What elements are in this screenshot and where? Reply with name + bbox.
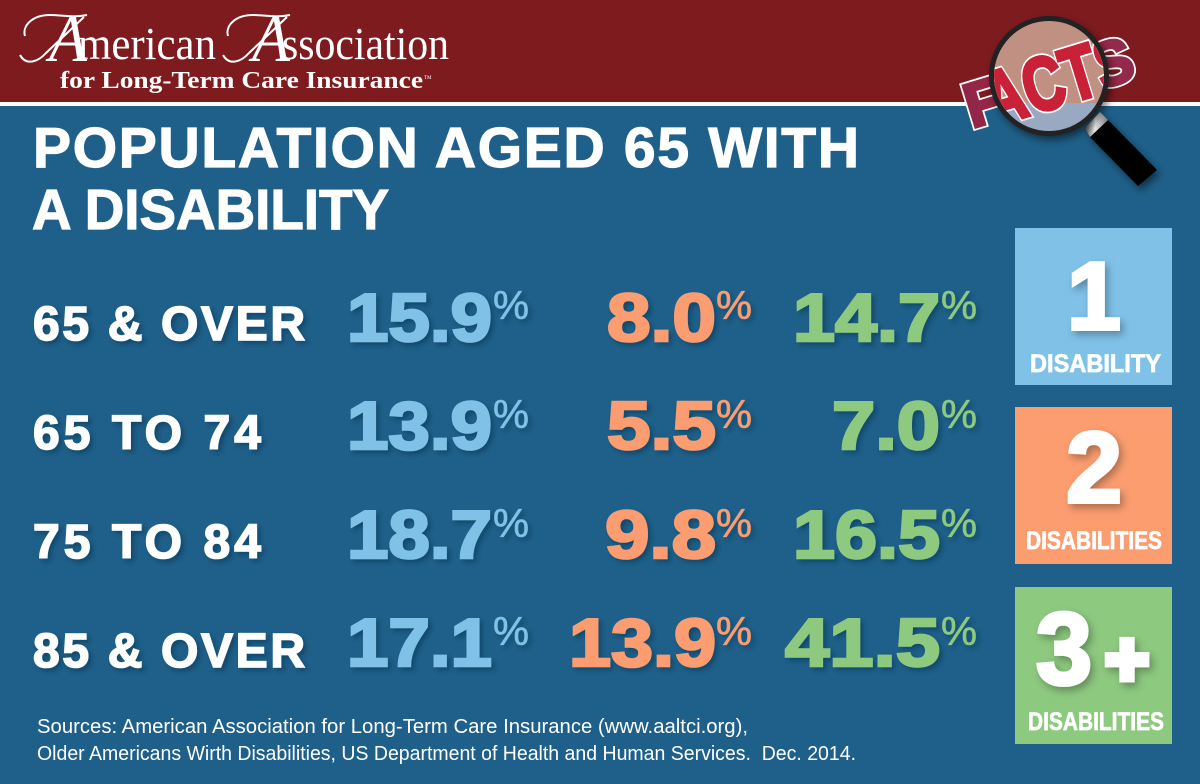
row: 85 & over: 13.9 (569, 605, 716, 681)
row: 65 & over: 14.7 (793, 280, 940, 356)
row: 65 to 74: % (493, 393, 529, 437)
legend: 3+ disabilities: DISABILITIES (1028, 708, 1164, 736)
title: POPULATION AGED 65 WITH (33, 116, 859, 180)
handle (1085, 112, 1157, 186)
legend: 3+ disabilities: + (1105, 617, 1149, 702)
icon: FACTS magnifying glass (942, 15, 1157, 186)
logo: American Association: A (248, 0, 290, 76)
row: 85 & over: % (716, 610, 752, 654)
header band (0, 0, 1200, 106)
row: 85 & over: 41.5 (785, 605, 940, 681)
row: 75 to 84: % (941, 502, 977, 546)
sources: Sources: American Association for Long-Term Care Insurance (www.aaltci.org), (37, 716, 748, 738)
logo: American Association: A (45, 0, 87, 76)
legend: 1 disability (1015, 228, 1172, 385)
sources (37, 716, 856, 765)
sources: Older Americans Wirth Disabilities, US Department of Health and Human Services. Dec. 2014. (37, 743, 856, 765)
FACTS word outside lens: FACTS (956, 25, 1142, 141)
row: 85 & over: % (493, 610, 529, 654)
logo: American Association: TM (424, 76, 432, 81)
row: 65 to 74: 5.5 (607, 388, 716, 464)
row: 65 & over: % (941, 284, 977, 328)
legend: 1 disability: 1 (1067, 243, 1121, 350)
lens (989, 16, 1109, 136)
row: 75 to 84 (33, 497, 977, 573)
row: 65 & over: 15.9 (347, 280, 492, 356)
row: 85 & over (33, 605, 977, 681)
row: 65 to 74 (33, 388, 977, 464)
legend: 3+ disabilities: 3 (1036, 592, 1092, 706)
row: 75 to 84: % (716, 502, 752, 546)
title (32, 116, 859, 242)
legend: 1 disability: DISABILITY (1030, 350, 1161, 378)
title: A DISABILITY (32, 178, 389, 242)
legend: 3+ disabilities (1015, 587, 1172, 744)
row: 65 & over: 8.0 (607, 280, 716, 356)
row: 65 & over: 65 & OVER (33, 298, 305, 351)
row: 75 to 84: 18.7 (347, 497, 492, 573)
row: 85 & over: 17.1 (347, 605, 492, 681)
legend: 2 disabilities (1015, 407, 1172, 564)
logo: American Association: ssociation (282, 18, 449, 69)
row: 85 & over: 85 & OVER (33, 625, 305, 678)
logo: American Association (20, 0, 449, 94)
row: 75 to 84: 9.8 (605, 497, 716, 573)
row: 65 to 74: % (716, 393, 752, 437)
row: 65 to 74: 7.0 (832, 388, 940, 464)
FACTS word outside lens: FACTS (956, 25, 1142, 141)
row: 75 to 84: 75 TO 84 (33, 516, 261, 569)
row: 65 & over: % (716, 284, 752, 328)
row: 65 & over (33, 280, 977, 356)
row: 65 to 74: % (941, 393, 977, 437)
logo: American Association: merican (78, 18, 216, 69)
row: 65 to 74: 13.9 (347, 388, 492, 464)
row: 65 & over: % (493, 284, 529, 328)
legend: 2 disabilities: 2 (1066, 412, 1122, 524)
row: 65 to 74: 65 TO 74 (33, 407, 261, 460)
row: 75 to 84: 16.5 (793, 497, 940, 573)
row: 85 & over: % (941, 610, 977, 654)
logo: American Association: for Long-Term Care Insurance (60, 68, 423, 94)
row: 75 to 84: % (493, 502, 529, 546)
legend: 2 disabilities: DISABILITIES (1026, 527, 1162, 555)
